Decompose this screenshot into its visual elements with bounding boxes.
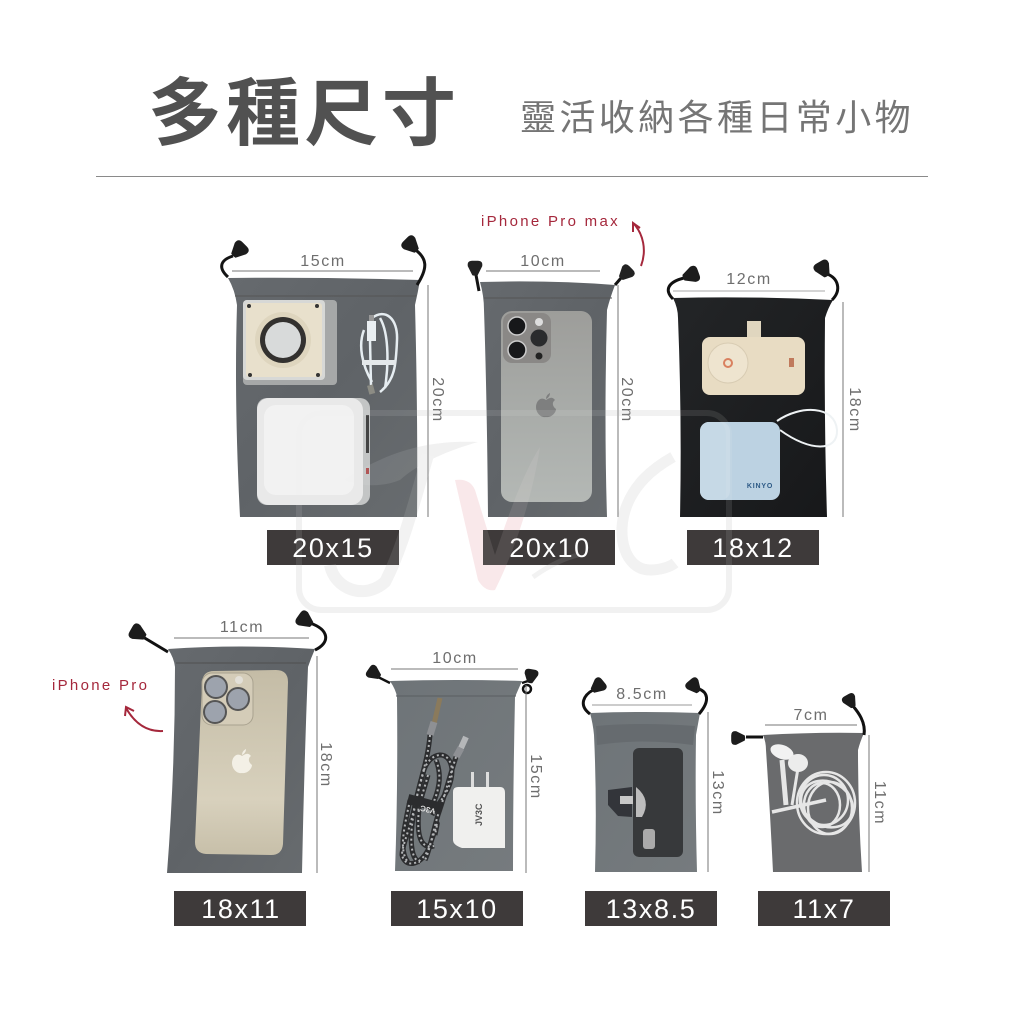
drawstring toggles <box>222 234 425 285</box>
icon: blue power bank with cable <box>700 410 837 500</box>
size label 20x10 <box>483 530 615 565</box>
icon: black power bank <box>608 748 683 857</box>
icon: white USB charger <box>453 772 505 848</box>
callout: iPhone Pro max <box>481 213 644 266</box>
callout: iPhone Pro: iPhone Pro <box>52 677 149 694</box>
pouch body <box>763 733 864 872</box>
drawstring toggles <box>127 609 326 652</box>
size label 11x7: 11x7 <box>793 894 855 924</box>
icon: braided cable: V3C <box>419 803 436 816</box>
icon: iPhone Pro Max <box>501 311 592 502</box>
icon: iPhone Pro <box>195 670 288 855</box>
icon: beige power bank <box>702 321 805 395</box>
dimension: 15cm: 15cm <box>300 253 346 270</box>
dimension: 10cm top <box>486 253 600 271</box>
drawstring toggles <box>668 258 838 300</box>
pouch body <box>167 646 315 873</box>
icon: speaker <box>243 300 337 385</box>
size label 18x12 <box>687 530 819 565</box>
dimension: 11cm <box>869 735 888 872</box>
size label 13x8.5: 13x8.5 <box>606 894 696 924</box>
dimension: 7cm: 7cm <box>793 707 829 724</box>
watermark <box>299 413 729 610</box>
size label 18x11 <box>174 891 306 926</box>
dimension: 15cm: 15cm <box>527 754 544 800</box>
panel: pouch 20x15 <box>222 234 425 517</box>
watermark overlay <box>299 413 729 610</box>
dimension: 8.5cm: 8.5cm <box>616 686 668 703</box>
panel: pouch 13x8.5 <box>583 676 707 872</box>
drawstring toggles <box>468 261 636 291</box>
dimension: 11cm: 11cm <box>220 619 264 636</box>
icon: white USB charger: JV3C <box>474 803 484 826</box>
size label 18x12: 18x12 <box>712 533 794 563</box>
size label 20x15 <box>267 530 399 565</box>
icon: blue power bank with cable: KINYO <box>747 483 773 490</box>
dimension: 10cm <box>391 650 518 669</box>
icon: braided cable <box>402 698 466 864</box>
panel: pouch 11x7 <box>731 692 864 872</box>
panel: pouch 20x10 <box>468 261 636 517</box>
size label 13x8.5 <box>585 891 717 926</box>
icon: wired earphones <box>768 741 861 837</box>
icon: white power bank <box>257 398 370 505</box>
dimension: 18cm: 18cm <box>846 387 863 433</box>
pouch body <box>673 297 833 517</box>
title: 多種尺寸 <box>148 72 460 155</box>
dimension: 8.5cm <box>592 686 692 705</box>
pouch body <box>590 712 700 872</box>
dimension: 10cm top: 10cm <box>520 253 566 270</box>
dimension: 11cm <box>174 619 309 638</box>
dimension: 18cm: 18cm <box>317 742 334 788</box>
pouch body <box>480 281 615 517</box>
icon: apple logo <box>232 749 252 773</box>
panel: pouch 18x11 <box>127 609 326 873</box>
icon: apple logo <box>536 393 556 417</box>
drawstring toggles <box>731 692 864 745</box>
icon: white cable <box>361 314 397 395</box>
size label 20x10: 20x10 <box>509 533 591 563</box>
size label 15x10 <box>391 891 523 926</box>
size label 20x15: 20x15 <box>292 533 374 563</box>
dimension: 12cm: 12cm <box>726 271 772 288</box>
panel: pouch 15x10 <box>364 663 539 871</box>
dimension: 20cm: 20cm <box>618 377 635 423</box>
drawstring toggles <box>583 676 707 714</box>
subtitle: 靈活收納各種日常小物 <box>520 97 914 138</box>
dimension: 10cm: 10cm <box>432 650 478 667</box>
cable strap <box>408 799 442 808</box>
callout: iPhone Pro max: iPhone Pro max <box>481 213 620 230</box>
panel: pouch 18x12 <box>668 258 838 517</box>
pouch body <box>390 680 522 871</box>
dimension: 13cm: 13cm <box>709 770 726 816</box>
size label 11x7 <box>758 891 890 926</box>
dimension: 20cm: 20cm <box>429 377 446 423</box>
drawstring toggles <box>364 663 539 693</box>
size label 15x10: 15x10 <box>416 894 498 924</box>
pouch body <box>228 278 420 517</box>
dimension: 7cm <box>765 707 857 725</box>
dimension: 11cm: 11cm <box>871 781 888 825</box>
callout: iPhone Pro <box>52 677 163 731</box>
size label 18x11: 18x11 <box>201 894 281 924</box>
